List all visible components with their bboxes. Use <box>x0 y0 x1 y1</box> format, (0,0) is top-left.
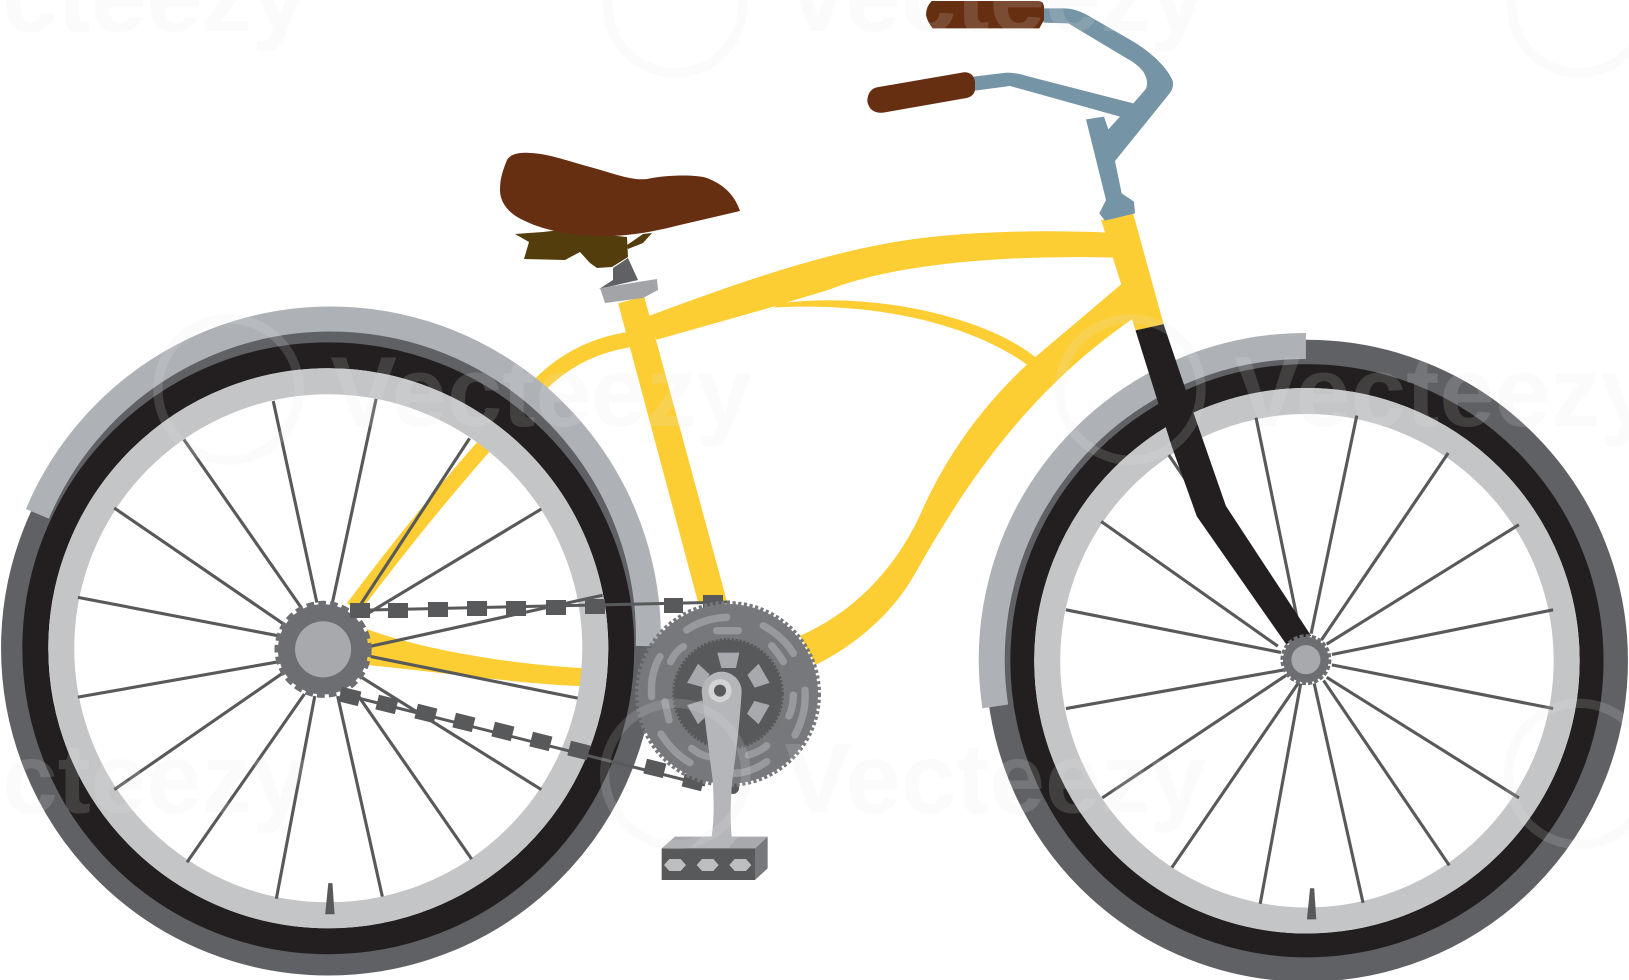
bicycle frame <box>353 211 1164 686</box>
chainring <box>637 603 819 794</box>
front wheel <box>998 352 1615 969</box>
handlebar <box>867 1 1173 221</box>
front fork <box>1136 324 1311 644</box>
watermark: Vecteezy <box>330 337 752 448</box>
rear wheel <box>12 332 645 965</box>
chain <box>338 595 730 791</box>
saddle clamp <box>515 230 658 303</box>
front hub <box>1282 636 1330 684</box>
saddle <box>500 153 740 236</box>
upper grip <box>926 1 1044 28</box>
crank arm <box>702 672 742 837</box>
front fender <box>992 346 1306 706</box>
lower grip <box>867 72 975 113</box>
pedal <box>662 837 768 880</box>
watermark: Vecteezy <box>784 723 1206 834</box>
rear sprocket <box>276 603 370 696</box>
rear fender <box>37 319 648 646</box>
